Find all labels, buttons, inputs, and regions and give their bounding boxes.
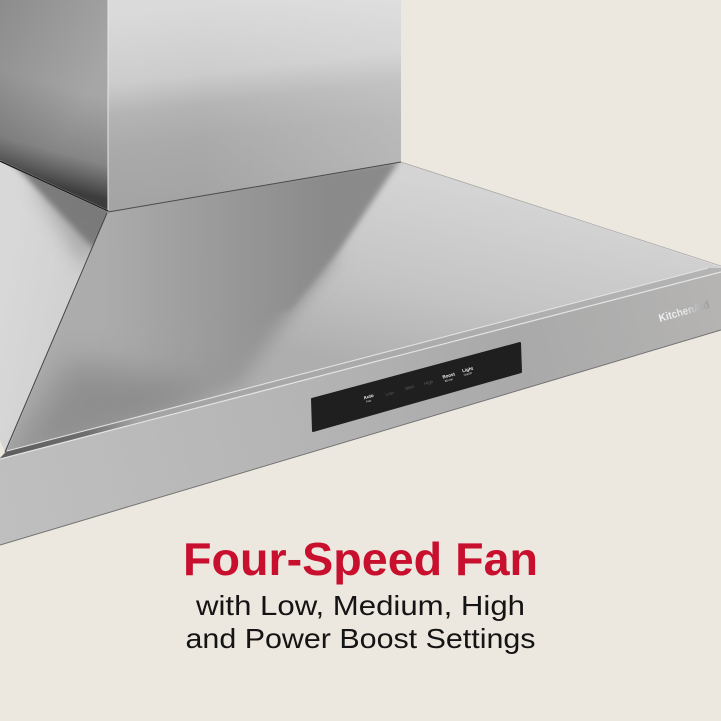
button labels: High <box>423 379 434 386</box>
control panel <box>312 343 521 431</box>
title: Four-Speed Fan <box>183 533 538 585</box>
chimney right face <box>108 0 401 212</box>
button labels: Low <box>385 390 395 397</box>
hood rim lip <box>0 162 721 459</box>
button labels: 30 min <box>444 377 454 383</box>
hood main sloped face <box>0 160 721 470</box>
button labels: Light <box>462 366 474 373</box>
subtitle: with Low, Medium, High <box>195 590 525 621</box>
button labels: On/Off <box>463 371 472 377</box>
front band <box>0 272 721 545</box>
button labels: Auto <box>363 393 374 400</box>
button labels: Boost <box>442 371 456 380</box>
button labels: Fan <box>366 398 372 404</box>
range hood product <box>0 0 721 545</box>
subtitle <box>186 590 536 654</box>
hood left face <box>0 162 108 451</box>
button labels: Med <box>405 384 415 391</box>
brand logo: KitchenAid <box>658 299 711 325</box>
button labels <box>363 366 474 404</box>
subtitle: and Power Boost Settings <box>186 623 536 654</box>
chimney left face <box>0 0 108 210</box>
seams <box>0 0 401 452</box>
